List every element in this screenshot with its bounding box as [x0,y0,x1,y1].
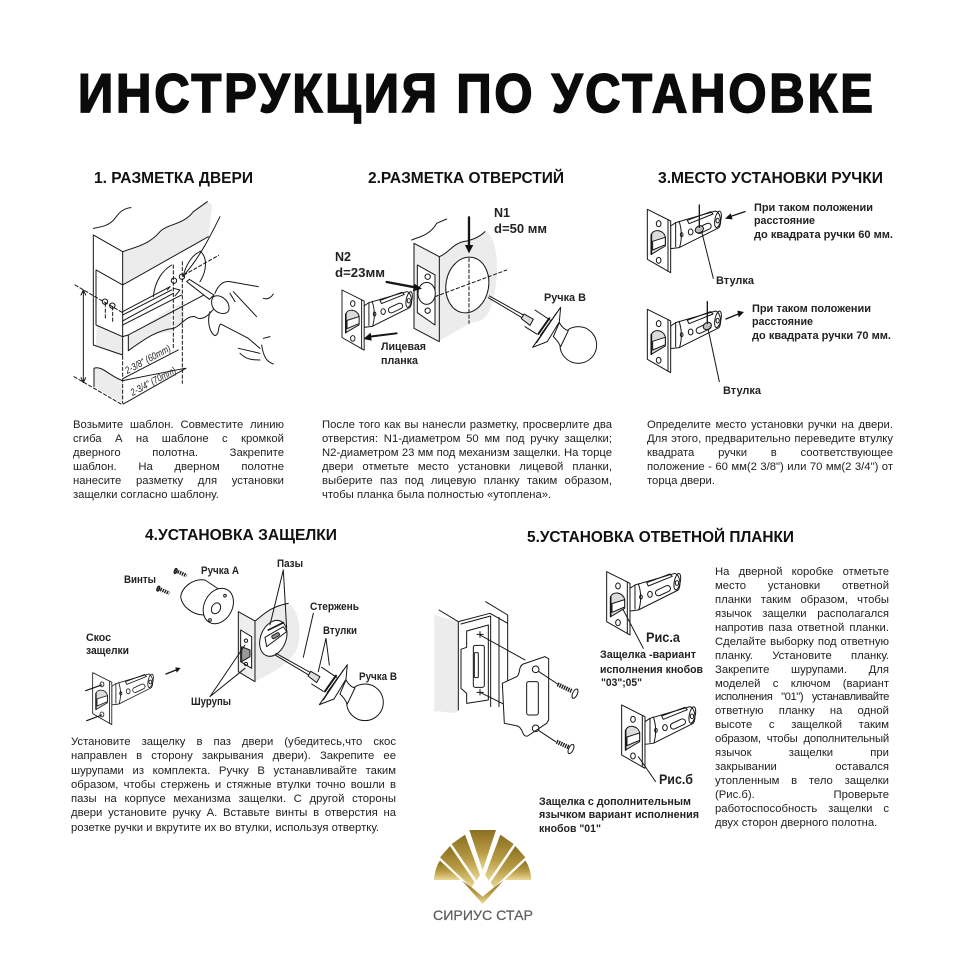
label: bushing, top: Втулка [716,275,755,287]
heading: step 4: 4.УСТАНОВКА ЗАЩЕЛКИ [145,527,337,544]
text: step 5 instructions: планку. Установите планку. [715,650,889,662]
text: step 5 instructions: язычок защелки при [715,747,889,759]
text: step 2 instructions: отверстия: N1-диаметром 50 мм под ручку защелки; [322,433,612,445]
text: step 1 instructions: дверного полотна. Закрепите [73,447,284,459]
text: step 2 instructions: N2-диаметром 23 мм под механизм защелки. На торце [322,447,612,459]
illustration: door with holes N1 and N2, latch and knob B [342,217,597,363]
text: step 1 instructions: сгиба А на шаблоне с кромкой [73,433,284,445]
label: latch bevel line 2: защелки [86,645,129,657]
label: bushings: Втулки [323,625,357,637]
text: step 5 instructions: исполнения "01") устанавливайте [715,691,889,703]
text: step 3 instructions: Определите место установки ручки на двери. [647,419,893,431]
illustration: exploded latch and knobs assembly [86,568,383,725]
illustration: latch set to 60 mm [647,205,745,278]
text: step 1 instructions: шаблон. На дверном полотне [73,461,284,473]
text: step 5 instructions: образом, чтобы дополнительный [715,733,889,745]
text: step 2 instructions: выберите паз под лицевую планку таким образом, [322,475,612,487]
text: step 2 instructions: чтобы планка была полностью «утоплена». [322,489,551,501]
label: strike plate: Лицевая [381,341,426,353]
heading: step 2: 2.РАЗМЕТКА ОТВЕРСТИЙ [368,168,564,187]
text: step 1 instructions [73,419,284,501]
title: ИНСТРУКЦИЯ ПО УСТАНОВКЕ [78,63,873,125]
logo wordmark: СИРИУС СТАР [433,907,533,923]
panel: step 2 hole marking [322,168,612,501]
text: step 5 instructions [715,566,889,829]
note: 70 mm position: При таком положении [752,303,871,315]
label: wood screws: Шурупы [191,696,231,708]
caption: latch with extra tongue: Защелка с дополнительным [539,796,691,808]
text: step 3 instructions: Для этого, предварительно переведите втулку [647,433,893,445]
text: step 5 instructions: Закрепите шурупами. Для [715,664,889,676]
text: step 3 instructions: положение - 60 мм(2 3/8") или 70 мм(2 3/4") от [647,461,893,473]
illustration: door frame with strike plate and screws [434,602,579,754]
text: step 5 instructions: ответную планку на одной [715,705,889,717]
label: slots: Пазы [277,558,303,570]
text: step 3 instructions: торца двери. [647,475,715,487]
text: step 5 instructions: двух сторон дверного полотна. [715,817,877,829]
note: 70 mm line 3: до квадрата ручки 70 мм. [752,330,891,342]
text: step 1 instructions: нанесите разметку для установки [73,475,284,487]
text: step 2 instructions: двери отметьте место установки лицевой планки, [322,461,612,473]
label: N1: N1 [494,206,510,220]
text: step 5 instructions: моделей с ключом (вариант [715,678,889,690]
text: step 5 instructions: работоспособность защелки с [715,803,889,815]
text: step 2 instructions [322,419,612,501]
caption: latch with extra tongue line 2: язычком вариант исполнения [539,809,699,821]
note: 60 mm position: При таком положении [754,202,873,214]
text: step 4 instructions: пазы на корпусе механизма защелки. С другой стороны [71,793,396,805]
heading: step 1: 1. РАЗМЕТКА ДВЕРИ [94,170,253,187]
text: step 5 instructions: место установки ответной [715,580,889,592]
caption: latch with extra tongue line 3: кнобов "01" [539,823,601,835]
text: step 5 instructions: утопленным в тело защелки [715,775,889,787]
heading: step 3: 3.МЕСТО УСТАНОВКИ РУЧКИ [658,170,883,187]
label: figure a: Рис.а [646,629,680,645]
text: step 4 instructions: направлен в сторону закрывания двери). Закрепите ее [71,750,396,762]
text: step 1 instructions: Возьмите шаблон. Совместите линию [73,419,284,431]
illustration: latch variant b [622,705,697,782]
text: step 5 instructions: язычок защелки располагался [715,608,889,620]
label: d=50 mm: d=50 мм [494,222,547,236]
caption: latch variant a line 3: "03";05" [601,677,642,689]
label: latch bevel: Скос [86,632,111,644]
note: 60 mm line 2: расстояние [754,215,815,227]
label: bushing, bottom: Втулка [723,385,762,397]
illustration: marking the door with a template and pencil: 2-3/8" (60mm) [123,343,173,377]
label: knob B: Ручка В [544,292,586,304]
text: step 3 instructions: квадрата ручки в соответствующее [647,447,893,459]
text: step 5 instructions: закрывании оставался [715,761,889,773]
text: step 4 instructions [71,736,396,834]
text: step 5 instructions: высоте с защелкой таким [715,719,889,731]
text: step 4 instructions: шурупами из комплекта. Ручку В устанавливайте таким [71,765,396,777]
note: 70 mm line 2: расстояние [752,316,813,328]
text: step 5 instructions: напротив паза ответной планки. [715,622,889,634]
label: knob B: Ручка В [359,671,397,683]
logo: Sirius Star [433,830,533,923]
panel: step 1 door marking [73,170,284,501]
label: figure b: Рис.б [659,771,693,787]
text: step 5 instructions: (Рис.б). Проверьте [715,789,889,801]
label: rod: Стержень [310,601,359,613]
illustration: latch set to 70 mm [647,302,744,382]
label: N2: N2 [335,250,351,264]
text: step 2 instructions: После того как вы нанесли разметку, просверлите два [322,419,612,431]
label: screws: Винты [124,574,156,586]
panel: step 4 latch installation [71,527,397,834]
illustration: marking the door with a template and pencil [74,202,273,405]
illustration: marking the door with a template and pencil: 2-3/4" (70mm) [128,365,178,399]
label: knob A: Ручка А [201,565,239,577]
panel: step 3 handle position [646,170,893,487]
text: step 3 instructions [647,419,893,487]
text: step 4 instructions: образом, чтобы стержень и стяжные втулки точно вошли в [71,779,396,791]
note: 60 mm line 3: до квадрата ручки 60 мм. [754,229,893,241]
label: strike plate line 2: планка [381,355,419,367]
label: d=23 mm: d=23мм [335,266,385,280]
logo mark: golden fan [434,830,531,904]
text: step 4 instructions: розетке ручки и вкрутите их во втулки, используя отвертку. [71,822,379,834]
text: step 1 instructions: защелки согласно шаблону. [73,489,219,501]
text: step 5 instructions: планки таким образом, чтобы [715,594,889,606]
text: step 4 instructions: двери установите ручку А. Вставьте винты в отверстия на [71,807,396,819]
illustration: latch variant a [607,572,682,648]
text: step 5 instructions: На дверной коробке отметьте [715,566,889,578]
text: step 5 instructions: Сделайте выборку под ответную [715,636,889,648]
panel: step 5 strike plate installation [434,527,889,835]
heading: step 5: 5.УСТАНОВКА ОТВЕТНОЙ ПЛАНКИ [527,527,794,546]
caption: latch variant a line 2: исполнения кнобов [600,664,703,676]
caption: latch variant a: Защелка -вариант [600,649,696,661]
